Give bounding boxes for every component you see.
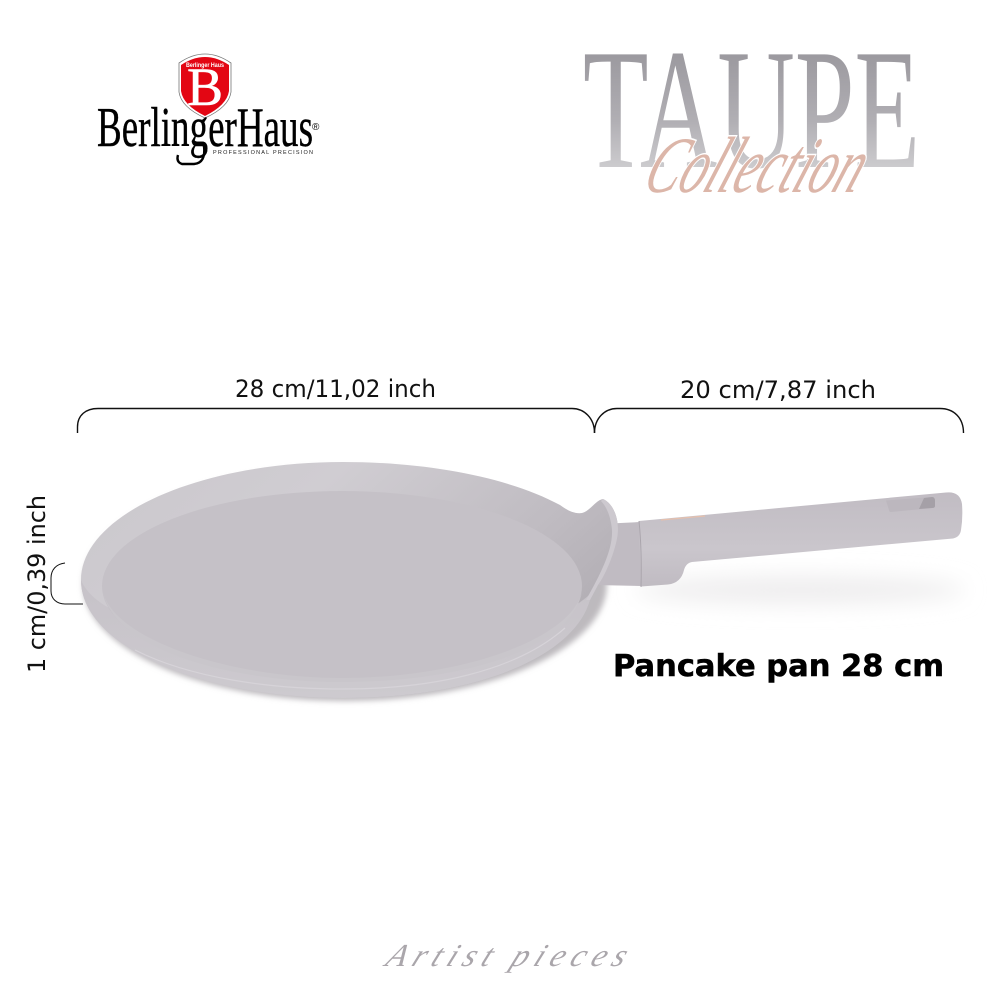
- hanging slot: [886, 497, 935, 512]
- lower rim: [81, 580, 598, 698]
- label: diameter: 28 cm/11,02 inch: [235, 375, 436, 403]
- lip outer edge: [586, 499, 618, 600]
- grip: [639, 492, 962, 586]
- tagline: PROFESSIONAL PRECISION: [213, 150, 313, 156]
- handle: [595, 492, 962, 587]
- bracket: height: [51, 563, 83, 604]
- copper accent: [661, 516, 705, 520]
- icon: red shield: B: [187, 57, 223, 117]
- dimension: pan diameter: [78, 375, 594, 433]
- logo: Taupe Collection: [583, 15, 920, 209]
- bracket: diameter: [78, 408, 594, 433]
- pancake pan: [81, 462, 962, 698]
- shadows: [83, 467, 965, 701]
- dimension: pan height: [23, 495, 83, 673]
- logo: Berlinger Haus: [97, 54, 320, 164]
- icon: red shield: Berlinger Haus: [186, 63, 225, 69]
- label: height: 1 cm/0,39 inch: [23, 495, 51, 673]
- registered mark: ®: [312, 122, 320, 133]
- pan body: [81, 462, 618, 698]
- rim band lines: [135, 628, 565, 689]
- wordmark: BerlingerHaus: [97, 97, 313, 159]
- label: handle: 20 cm/7,87 inch: [680, 376, 876, 404]
- collar edge: [639, 521, 641, 587]
- floor lower bevel: [103, 592, 582, 682]
- descender flourish: [178, 146, 204, 164]
- icon: red shield: [179, 54, 231, 118]
- cooking surface: [102, 491, 582, 681]
- product name: Pancake pan 28 cm: [613, 649, 944, 684]
- footer: Artist pieces: Artist pieces: [379, 938, 634, 974]
- neck: [595, 522, 641, 586]
- dimension: handle length: [594, 376, 964, 433]
- bracket: handle: [594, 408, 964, 433]
- script: Collection: Collection: [633, 121, 884, 209]
